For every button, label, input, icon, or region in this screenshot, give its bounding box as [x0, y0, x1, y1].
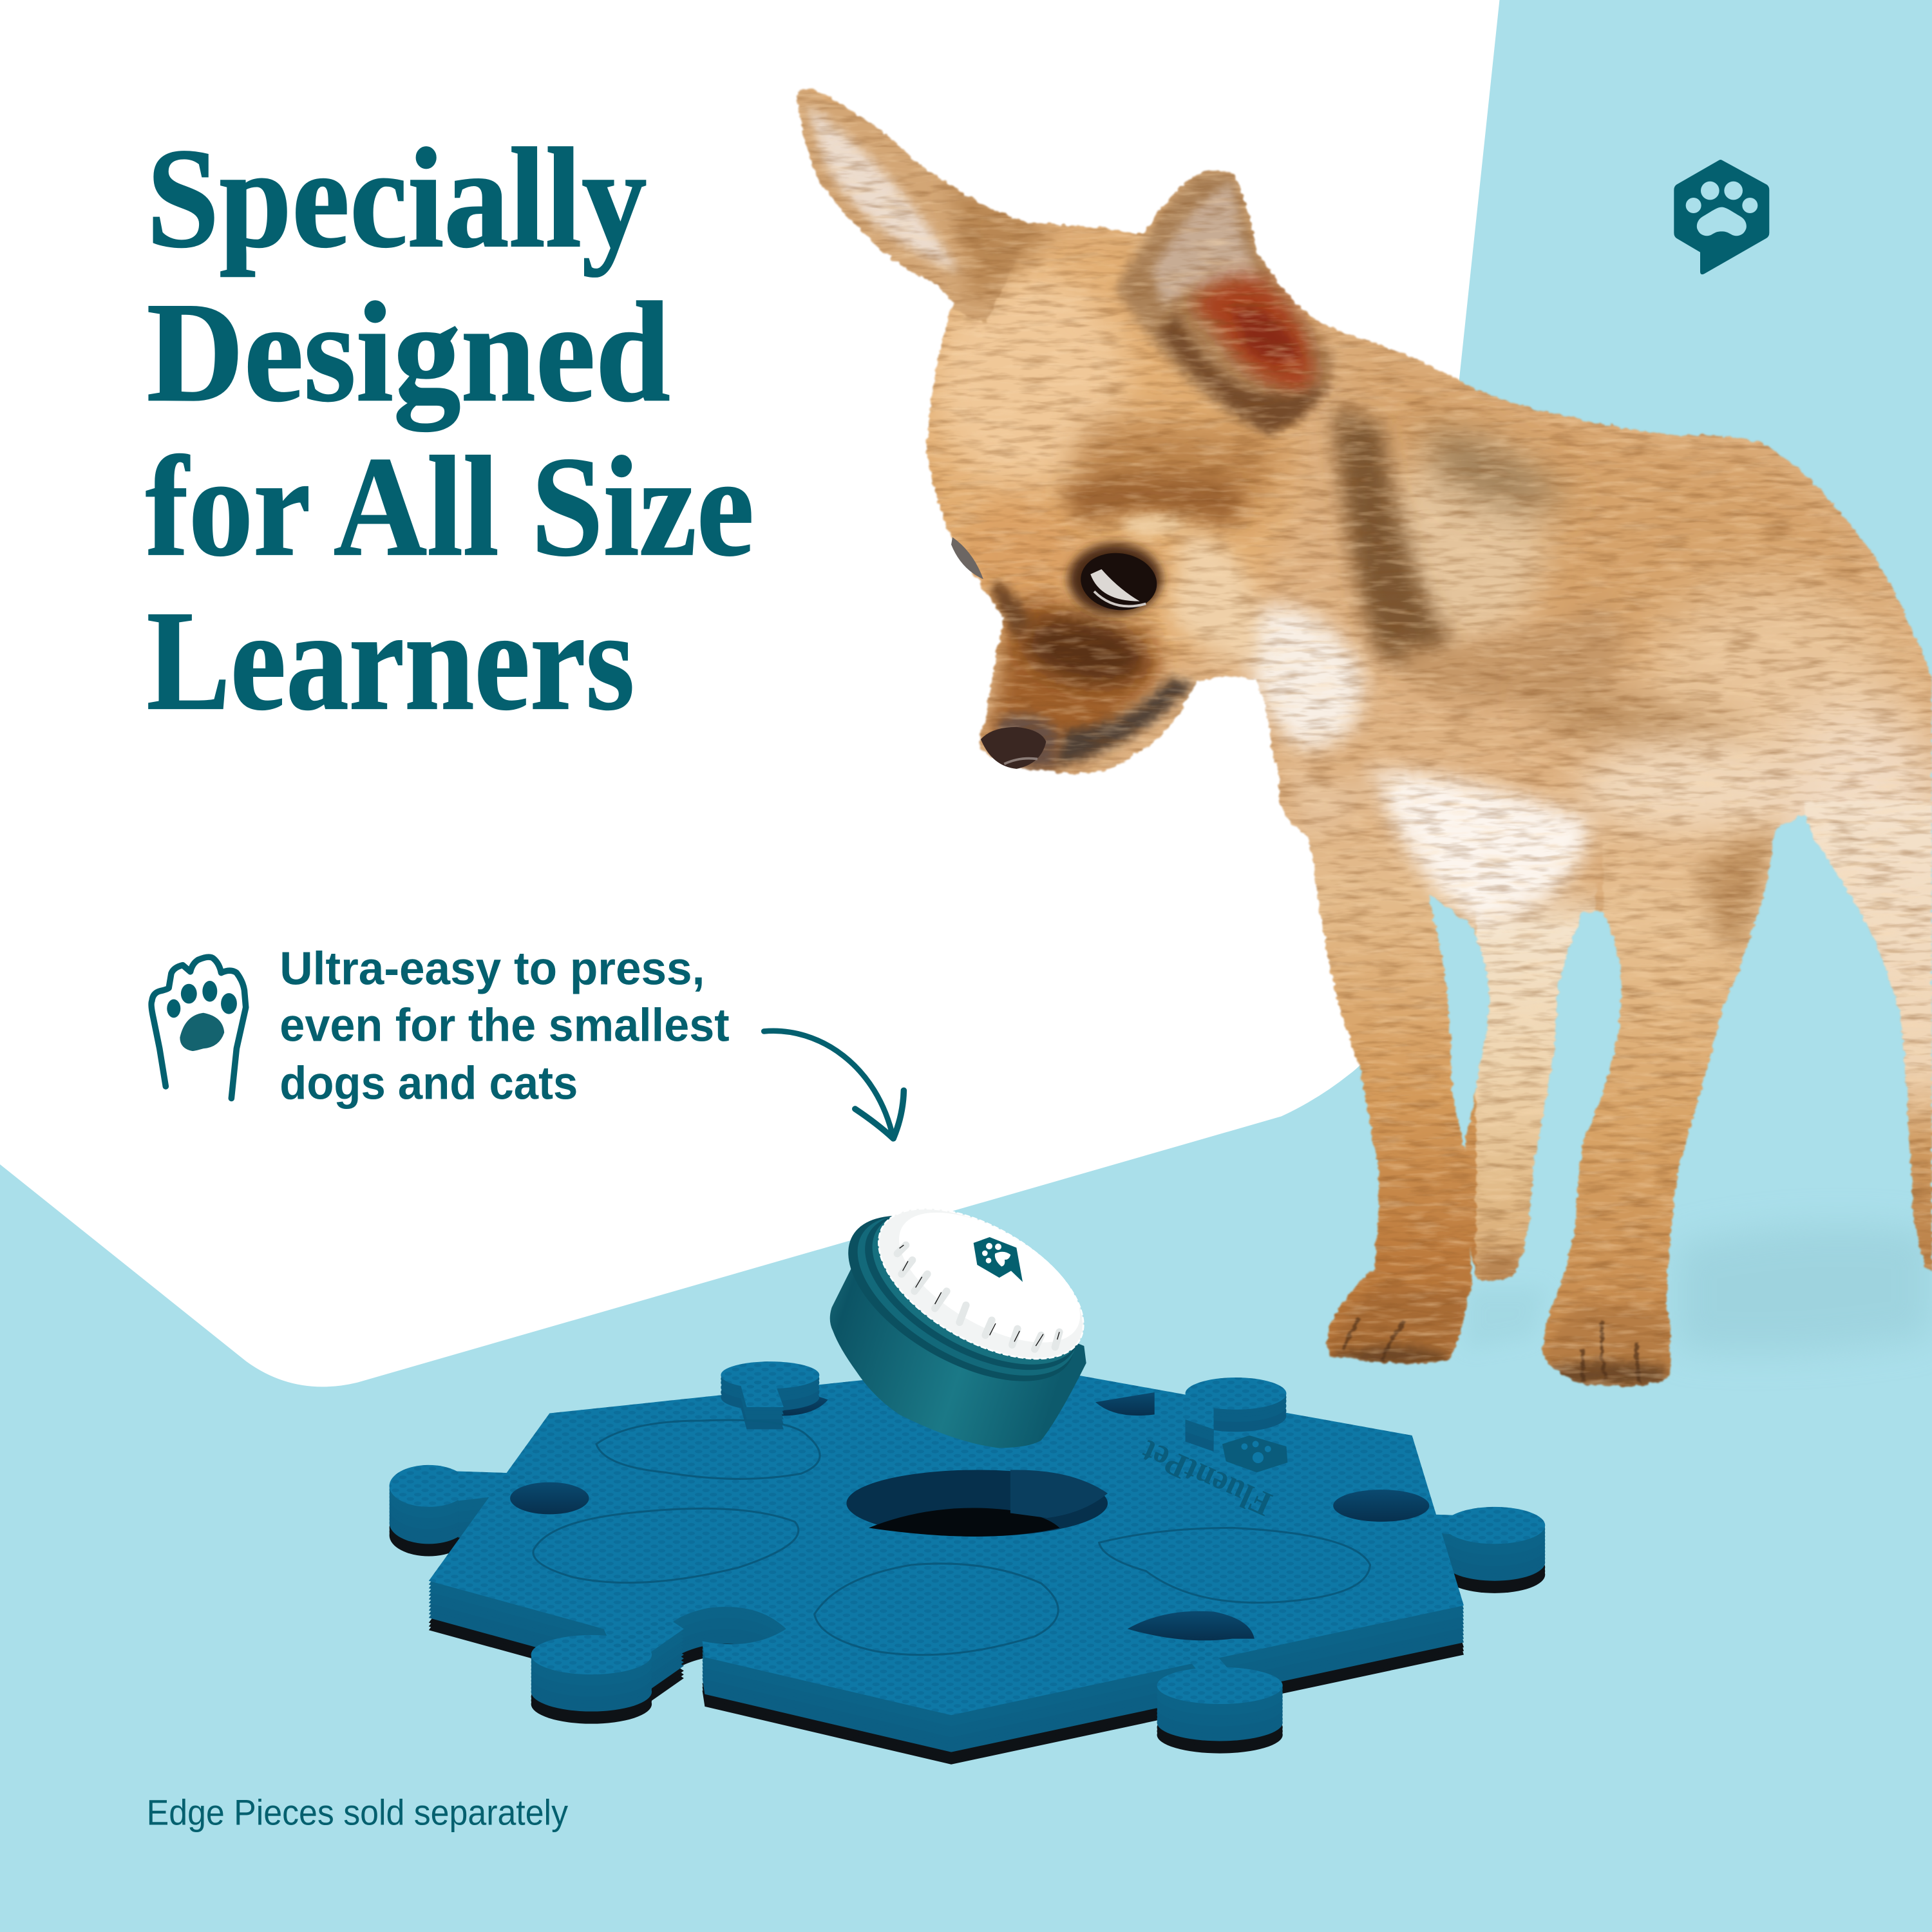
button — [822, 1167, 1110, 1448]
dog face details — [951, 537, 1162, 769]
heading: Specially — [147, 119, 647, 278]
dog back and flank shading — [1321, 362, 1932, 851]
cap logo — [974, 1237, 1023, 1282]
icon: hand-drawn paw — [151, 957, 246, 1098]
heading: Designed — [147, 273, 670, 431]
right eye — [1068, 544, 1162, 615]
feature text — [279, 943, 730, 1110]
cap tick marks — [897, 1245, 1059, 1349]
mat top surface — [390, 1364, 1545, 1715]
logo: speech-bubble paw — [1674, 160, 1769, 274]
heading: for All Size — [146, 428, 754, 586]
heading — [146, 119, 754, 740]
footnote: Edge Pieces sold separately — [147, 1793, 568, 1833]
pad outlines — [533, 1420, 1370, 1655]
button rings — [822, 1167, 1110, 1415]
left eye — [951, 537, 983, 579]
feature text: even for the smallest — [279, 999, 730, 1052]
button cap — [854, 1178, 1108, 1390]
arrow — [764, 1031, 904, 1139]
dog legs — [1282, 788, 1932, 1392]
dog shadow — [1466, 1226, 1932, 1353]
feature text: Ultra-easy to press, — [279, 943, 705, 995]
raised top knobs — [721, 1361, 1286, 1452]
socket holes — [510, 1392, 1429, 1640]
central hole — [846, 1470, 1108, 1537]
mat logo: FluentPet — [1135, 1433, 1277, 1524]
dog base coat — [801, 88, 1932, 1208]
white background panel — [0, 0, 1499, 1387]
nose — [981, 727, 1046, 769]
feature text: dogs and cats — [279, 1057, 578, 1110]
right ear — [1115, 171, 1333, 433]
dog head — [900, 234, 1294, 770]
heading: Learners — [147, 582, 634, 740]
left ear — [795, 86, 1054, 323]
dog — [788, 74, 1932, 1405]
mat base and side walls — [390, 1368, 1545, 1765]
button body — [830, 1254, 1086, 1448]
dog chest — [1238, 605, 1589, 927]
puzzle mat — [390, 1361, 1545, 1765]
